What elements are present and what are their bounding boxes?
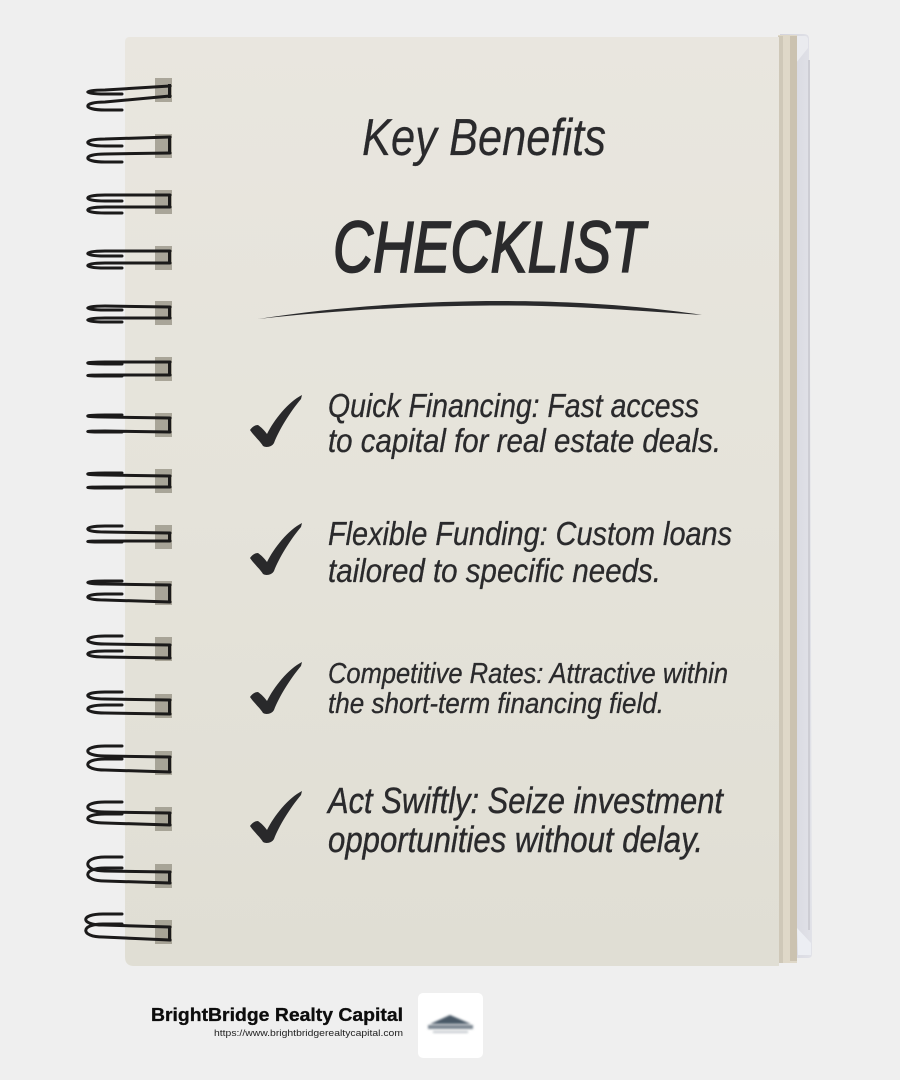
logo card: [418, 993, 483, 1058]
icon: blurred logo: [428, 1015, 473, 1033]
ring 8: [88, 469, 172, 493]
title: CHECKLIST: CHECKLIST: [333, 208, 649, 288]
ring 13: [88, 746, 172, 775]
back cover: [780, 34, 812, 958]
checklist item 1: [250, 387, 721, 459]
footer: url: https://www.brightbridgerealtycapital.com: [214, 1028, 403, 1039]
page stack: [778, 35, 797, 963]
text: flexible funding: [328, 515, 732, 589]
ring 7: [88, 413, 172, 437]
text: quick financing: to capital for real estate deals.: [328, 422, 721, 459]
ring 12: [88, 692, 172, 718]
text: competitive rates: Competitive Rates: Attractive within: [328, 658, 728, 690]
ring 10: [88, 581, 172, 605]
ring 11: [88, 636, 172, 661]
text: quick financing: [328, 387, 721, 459]
text: act swiftly: Act Swiftly: Seize investment: [326, 780, 725, 821]
ring 9: [88, 525, 172, 549]
icon: check mark 3: [250, 662, 302, 714]
text: act swiftly: [326, 780, 725, 860]
text: competitive rates: the short-term financing field.: [328, 688, 664, 720]
text: quick financing: Quick Financing: Fast access: [328, 387, 699, 424]
spiral binding: [86, 78, 172, 944]
text: act swiftly: opportunities without delay.: [328, 819, 703, 860]
ring 2: [88, 134, 172, 162]
ring 15: [88, 857, 172, 888]
underline swoosh: [258, 301, 702, 319]
icon: check mark 2: [250, 523, 302, 575]
checklist item 4: [250, 780, 725, 860]
checklist item 2: [250, 515, 732, 589]
checklist item 3: [250, 658, 728, 720]
icon: check mark 1: [250, 395, 302, 447]
ring 6: [88, 357, 172, 381]
text: flexible funding: tailored to specific needs.: [328, 552, 661, 589]
icon: check mark 4: [250, 791, 302, 843]
ring 1: [88, 78, 172, 110]
ring 16: [86, 914, 172, 944]
ring 4: [88, 246, 172, 270]
ring 14: [88, 802, 172, 831]
heading: Key Benefits: Key Benefits: [362, 109, 606, 167]
ring 3: [88, 190, 172, 214]
ring 5: [88, 301, 172, 325]
notebook: [125, 34, 812, 966]
text: competitive rates: [328, 658, 728, 720]
text: flexible funding: Flexible Funding: Custom loans: [328, 515, 732, 552]
front page: [125, 37, 779, 966]
footer: company name: BrightBridge Realty Capital: [151, 1005, 403, 1025]
